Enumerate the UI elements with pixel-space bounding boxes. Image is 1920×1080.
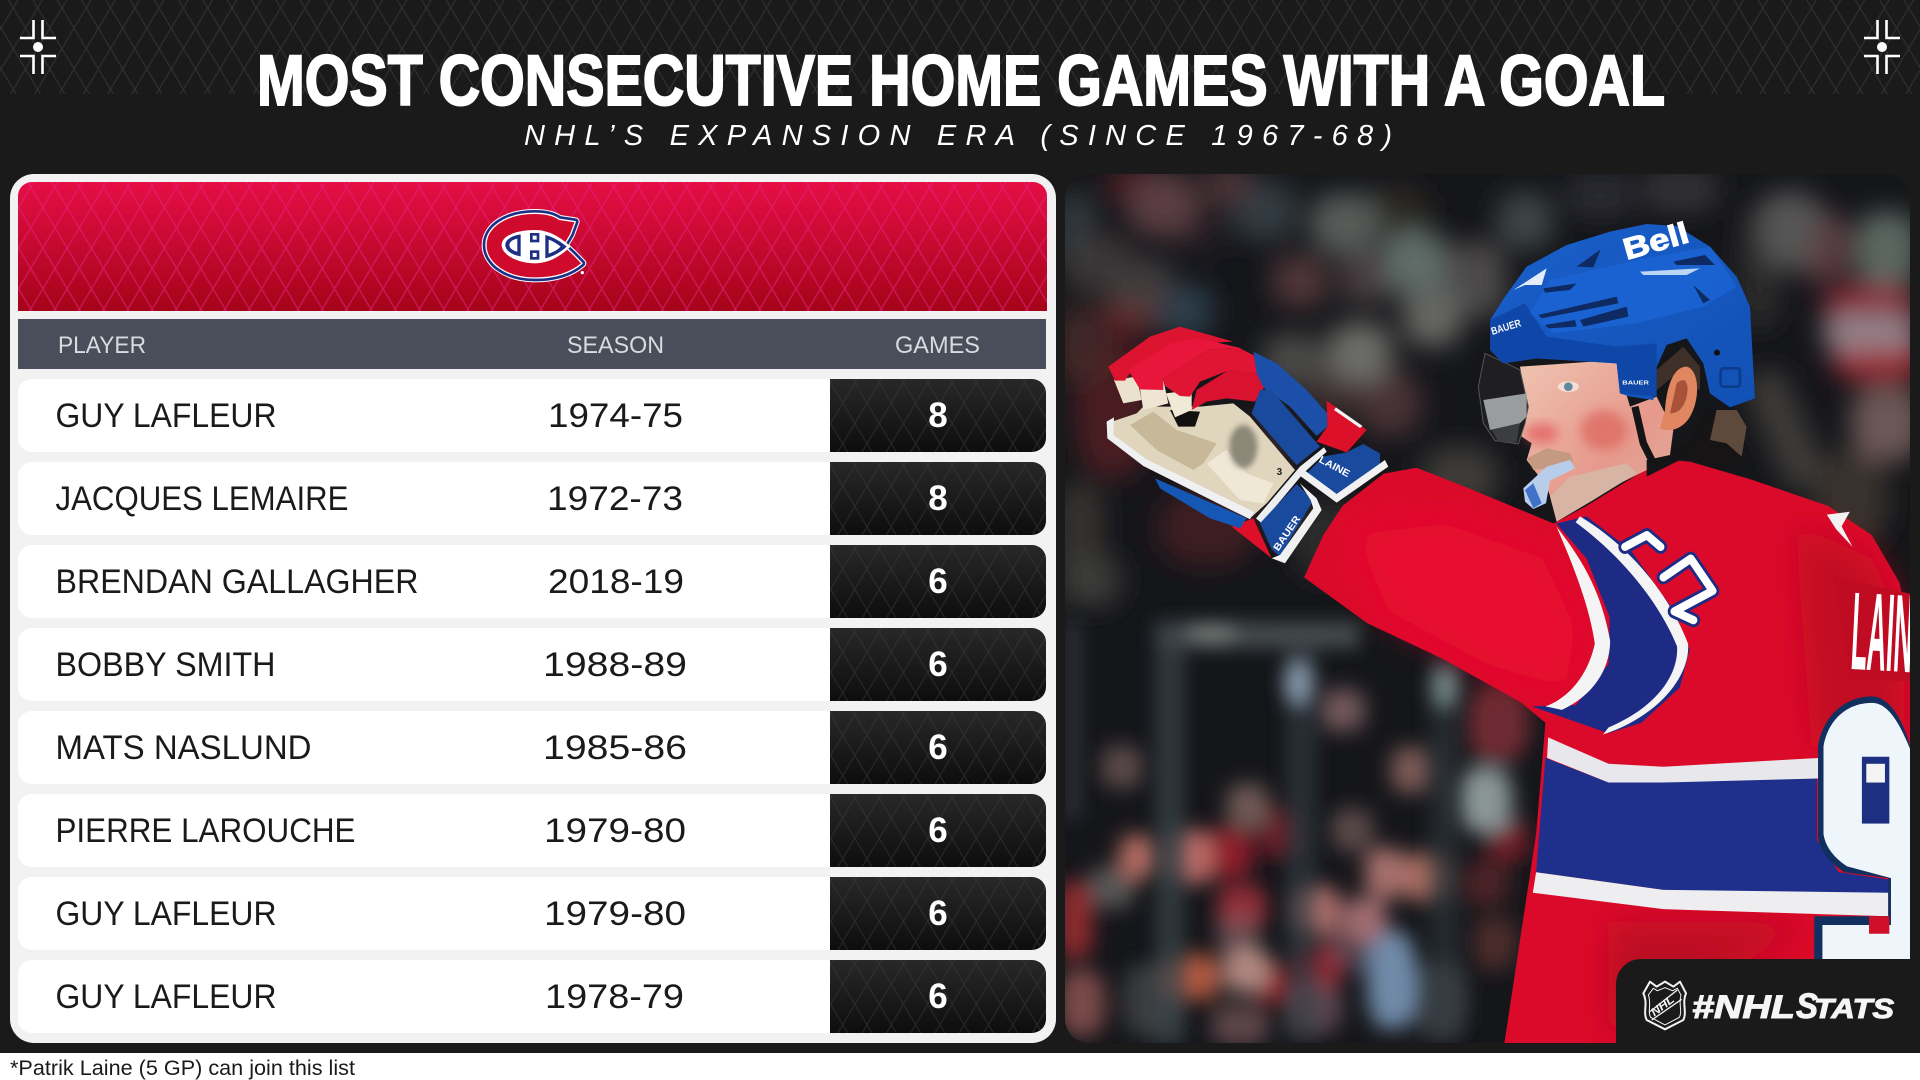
footnote: *Patrik Laine (5 GP) can join this list bbox=[10, 1057, 355, 1080]
row 6: 1979-80 bbox=[544, 812, 686, 850]
icon: Canadiens logo bbox=[486, 213, 584, 278]
blue back of hand bbox=[1253, 352, 1327, 436]
player head and helmet: BAUER bbox=[1490, 317, 1523, 338]
panel: player photo illustration bbox=[1061, 172, 1916, 1051]
name plate bbox=[1871, 585, 1910, 682]
hashtag text: TATS bbox=[1814, 993, 1894, 1024]
row 1: 1974-75 bbox=[548, 397, 683, 435]
row 3: 2018-19 bbox=[548, 563, 684, 601]
blurred lower crowd bbox=[1064, 691, 1522, 1039]
neck shadow bbox=[1646, 459, 1679, 477]
player glove: 3 bbox=[1277, 467, 1283, 478]
row 2: 1972-73 bbox=[547, 480, 683, 518]
player glove: BAUER bbox=[1272, 514, 1303, 553]
player glove bbox=[1107, 327, 1388, 563]
chin strap bbox=[1631, 406, 1655, 460]
row 4: 1988-89 bbox=[543, 646, 687, 684]
row 4: BOBBY SMITH bbox=[56, 646, 276, 684]
hashtag text: #NHL bbox=[1692, 989, 1795, 1025]
table header bar bbox=[18, 319, 1046, 369]
hashtag text bbox=[1692, 987, 1894, 1026]
column label: games: GAMES bbox=[895, 332, 980, 359]
row 2: 8 bbox=[928, 479, 948, 518]
player head and helmet: BAUER bbox=[1622, 380, 1649, 386]
sleeve number bbox=[1625, 535, 1713, 620]
blurred arena glass posts bbox=[1065, 620, 1461, 1045]
icon: top-left crosshair mark bbox=[20, 20, 56, 74]
red cuff bbox=[1317, 401, 1367, 452]
wrist pad bbox=[1307, 444, 1380, 495]
row 5: MATS NASLUND bbox=[56, 729, 312, 767]
mouthguard bbox=[1523, 460, 1575, 509]
row 8 bbox=[18, 960, 1046, 1033]
torso stripes bbox=[1536, 758, 1899, 896]
helmet text: Bell bbox=[1619, 217, 1693, 267]
icon: NHL shield: NHL bbox=[1649, 994, 1677, 1019]
header lattice pattern bbox=[0, 0, 1920, 94]
team banner bbox=[18, 182, 1047, 311]
palm bbox=[1107, 403, 1295, 518]
row 7: 1979-80 bbox=[544, 895, 686, 933]
row 5: 6 bbox=[928, 728, 948, 767]
helmet vents bbox=[1538, 249, 1715, 328]
row 7: 6 bbox=[928, 894, 948, 933]
row 7 bbox=[18, 877, 1046, 950]
row 5: 1985-86 bbox=[543, 729, 687, 767]
red fingers bbox=[1108, 327, 1233, 381]
row 8: 1978-79 bbox=[545, 978, 684, 1016]
row 6: PIERRE LAROUCHE bbox=[56, 812, 356, 850]
column label: season: SEASON bbox=[567, 332, 664, 359]
row 4: 6 bbox=[928, 645, 948, 684]
row 2 bbox=[18, 462, 1046, 535]
row 6 bbox=[18, 794, 1046, 867]
row 3 bbox=[18, 545, 1046, 618]
row 2: JACQUES LEMAIRE bbox=[56, 480, 348, 518]
player head and helmet bbox=[1478, 217, 1755, 522]
row 6: 6 bbox=[928, 811, 948, 850]
row 3: 6 bbox=[928, 562, 948, 601]
player jersey bbox=[1304, 459, 1916, 1051]
fleur mark bbox=[1827, 512, 1853, 547]
glove text: LAINE bbox=[1317, 455, 1352, 480]
jersey number 9 bbox=[1814, 696, 1910, 962]
blurred crowd background bbox=[1061, 172, 1915, 598]
icon: NHL shield bbox=[1643, 982, 1686, 1029]
row 7: GUY LAFLEUR bbox=[56, 895, 276, 933]
helmet shell bbox=[1490, 224, 1755, 407]
hashtag text: S bbox=[1796, 987, 1818, 1026]
sleeve stripes bbox=[1532, 516, 1690, 733]
row 5 bbox=[18, 711, 1046, 784]
hashtag tab bbox=[1616, 959, 1912, 1043]
fingertips bbox=[1114, 377, 1142, 403]
row 4 bbox=[18, 628, 1046, 701]
subtitle: NHL’S EXPANSION ERA (SINCE 1967-68) bbox=[524, 120, 1392, 152]
row 1: GUY LAFLEUR bbox=[56, 397, 276, 435]
row 8: 6 bbox=[928, 977, 948, 1016]
column label: player: PLAYER bbox=[58, 332, 146, 359]
row 8: GUY LAFLEUR bbox=[56, 978, 276, 1016]
icon: top-right crosshair mark bbox=[1864, 20, 1900, 74]
row 1 bbox=[18, 379, 1046, 452]
panel: leaderboard table bbox=[10, 174, 1056, 1043]
visor bbox=[1478, 353, 1528, 444]
lower trim and red piece bbox=[1232, 518, 1272, 558]
ear and hair bbox=[1657, 347, 1700, 390]
row 1: 8 bbox=[928, 396, 948, 435]
row 3: BRENDAN GALLAGHER bbox=[56, 563, 418, 601]
face bbox=[1517, 360, 1673, 522]
jersey shading bbox=[1356, 523, 1905, 1039]
palm trim bbox=[1107, 417, 1254, 519]
